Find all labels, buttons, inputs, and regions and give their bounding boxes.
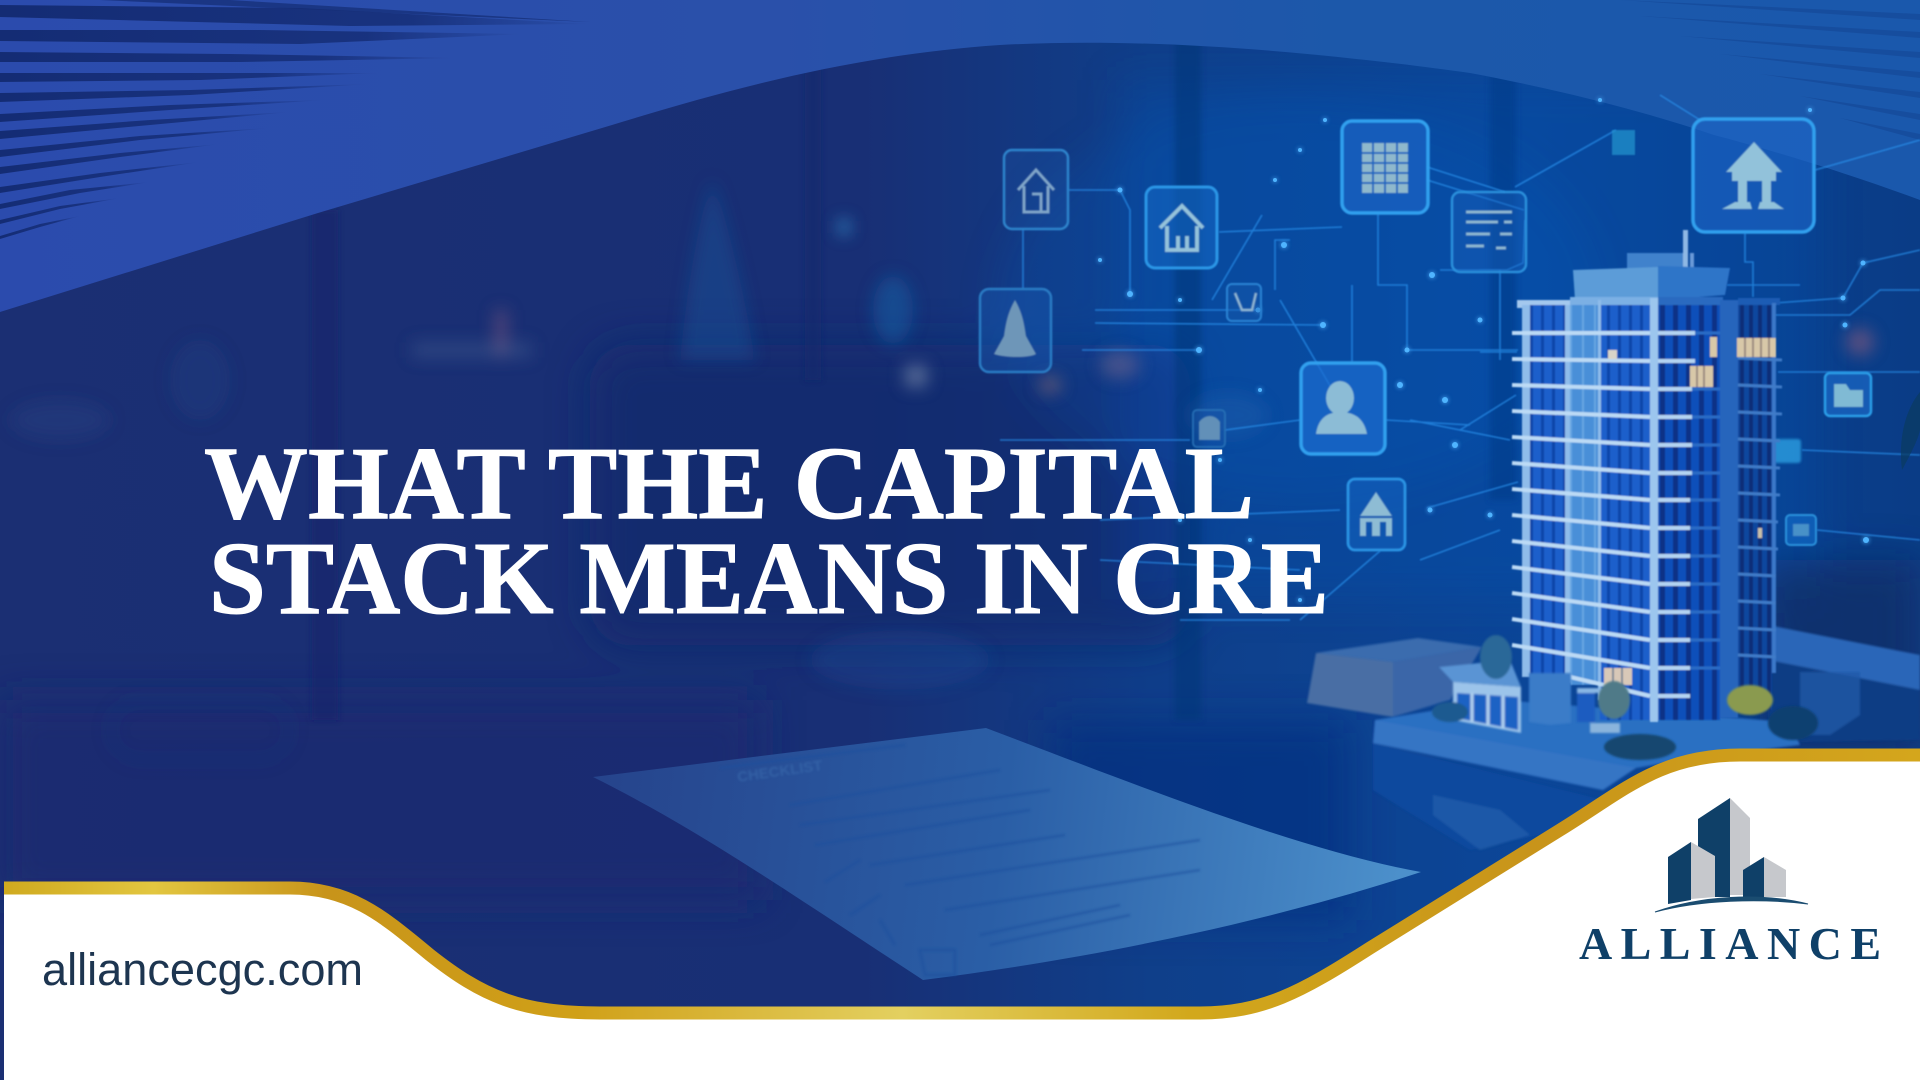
building model	[1512, 230, 1782, 722]
paper lines	[720, 745, 1200, 975]
white footer shape	[4, 755, 1920, 1080]
circuit network lines	[1000, 95, 1920, 620]
icon: person	[1301, 363, 1385, 454]
icon: bank	[1693, 119, 1814, 232]
low block left	[1307, 638, 1482, 717]
title	[204, 426, 1329, 636]
tower left face	[1530, 305, 1650, 720]
model platform	[1373, 700, 1800, 850]
lit windows	[1604, 337, 1776, 685]
paper heading: CHECKLIST	[736, 757, 824, 786]
logo: Alliance	[1579, 798, 1881, 969]
icon: house outline	[1004, 150, 1068, 229]
floating icons	[980, 119, 1871, 550]
window blinds right	[1620, 0, 1920, 140]
logo mark	[1655, 798, 1808, 912]
plant silhouette	[1901, 392, 1920, 470]
icon: small chart	[1227, 284, 1261, 321]
icon: folder	[1825, 373, 1871, 416]
gold ribbon	[4, 755, 1920, 1013]
icon: small square	[1612, 130, 1635, 155]
tower columns	[1522, 298, 1658, 722]
icon: small building	[1193, 410, 1225, 447]
podium and landscaping	[1432, 635, 1818, 760]
website url: alliancecgc.com	[42, 944, 363, 995]
tower floor slabs	[1512, 333, 1782, 696]
title: WHAT THE CAPITAL	[204, 426, 1254, 541]
icon: skyscraper	[980, 289, 1051, 372]
top wave overlay	[0, 0, 1920, 312]
tower roof	[1517, 230, 1780, 308]
title: STACK MEANS IN CRE	[209, 521, 1329, 636]
circuit nodes	[1098, 98, 1869, 602]
icon: small card	[1786, 515, 1816, 545]
icon: document	[1452, 192, 1526, 272]
icon: table grid	[1342, 121, 1428, 213]
tower right face	[1658, 300, 1776, 720]
logo wordmark: ALLIANCE	[1579, 918, 1881, 969]
window blinds left	[0, 0, 590, 239]
icon: house filled	[1146, 187, 1217, 268]
icon: bank small	[1348, 479, 1405, 550]
icon: small teal tile	[1773, 439, 1801, 463]
low block right	[1768, 625, 1920, 742]
checklist paper	[593, 728, 1421, 980]
